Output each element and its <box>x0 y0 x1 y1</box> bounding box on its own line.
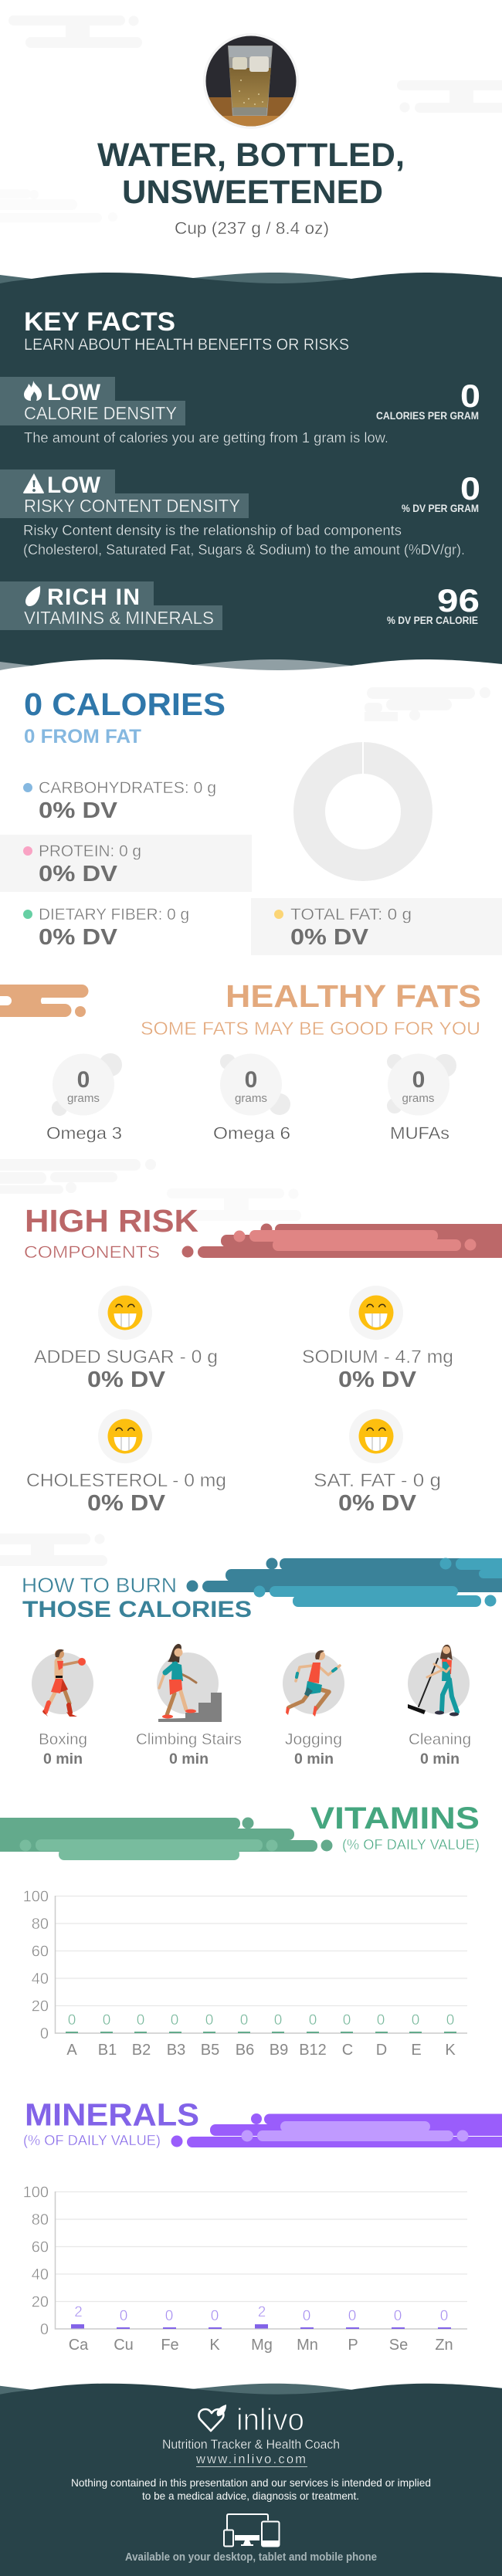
bar chart: minerals: Zn <box>435 2337 453 2354</box>
bar chart: vitamins: 0 <box>240 2012 248 2029</box>
bar chart: minerals <box>23 2184 467 2354</box>
minerals heading: MINERALS <box>25 2097 199 2133</box>
bar chart: minerals: Cu <box>114 2337 134 2354</box>
bar chart: minerals: P <box>348 2337 358 2354</box>
bar chart: vitamins: 20 <box>32 1998 49 2015</box>
swoosh <box>182 1223 502 1258</box>
bar chart: vitamins: 0 <box>205 2012 213 2029</box>
activity minutes: 0 min <box>294 1751 334 1768</box>
cholesterol: 0% DV <box>87 1491 166 1516</box>
omega 3: grams <box>67 1092 100 1105</box>
omega 6: Omega 6 <box>213 1124 290 1143</box>
protein <box>0 835 252 892</box>
title: WATER, BOTTLED, <box>97 137 405 174</box>
activity minutes: 0 min <box>169 1751 209 1768</box>
bar chart: vitamins: 0 <box>343 2012 351 2029</box>
bar chart: vitamins: 0 <box>274 2012 282 2029</box>
bar chart: vitamins: 0 <box>412 2012 419 2029</box>
activity labels: Cleaning <box>409 1731 471 1748</box>
key facts heading: LEARN ABOUT HEALTH BENEFITS OR RISKS <box>24 336 349 354</box>
total fat: 0% DV <box>290 925 369 950</box>
panel: burn calories <box>22 1558 502 1768</box>
panel: key facts <box>0 273 502 683</box>
bar chart: vitamins: B9 <box>270 2042 288 2059</box>
risky content density fact: RISKY CONTENT DENSITY <box>24 496 240 516</box>
activity labels <box>39 1731 471 1748</box>
panel: burn calories: THOSE CALORIES <box>22 1597 252 1622</box>
vitamins and minerals fact: RICH IN <box>47 585 140 610</box>
protein: PROTEIN: 0 g <box>39 842 141 860</box>
high risk heading: HIGH RISK <box>25 1203 198 1239</box>
bar chart: minerals: 0 <box>394 2308 402 2324</box>
bar chart: vitamins: B2 <box>132 2042 151 2059</box>
swoosh <box>171 2113 502 2147</box>
bar chart: vitamins: 0 <box>171 2012 178 2029</box>
activity minutes: 0 min <box>420 1751 460 1768</box>
bar chart: vitamins: E <box>411 2042 422 2059</box>
calorie density fact <box>0 377 480 446</box>
sodium: SODIUM - 4.7 mg <box>302 1347 453 1368</box>
risky content density fact <box>0 469 480 558</box>
calorie density fact: CALORIES PER GRAM <box>376 410 479 422</box>
risky content density fact: Risky Content density is the relationship of bad components <box>23 523 402 538</box>
total fat: TOTAL FAT: 0 g <box>290 906 412 924</box>
carbohydrates: 0% DV <box>39 798 118 823</box>
healthy fats subtitle: SOME FATS MAY BE GOOD FOR YOU <box>141 1019 480 1039</box>
logo wordmark: inlivo <box>236 2403 304 2437</box>
calorie density fact: CALORIE DENSITY <box>24 403 177 423</box>
cholesterol: CHOLESTEROL - 0 mg <box>26 1470 226 1491</box>
sodium: 0% DV <box>338 1368 417 1392</box>
title <box>97 137 405 211</box>
omega 3: 0 <box>77 1067 90 1093</box>
bar chart: minerals: 2 <box>258 2304 266 2320</box>
key facts heading: KEY FACTS <box>24 307 175 337</box>
bar chart: vitamins <box>23 1889 467 2059</box>
bar chart: minerals: 40 <box>32 2266 49 2283</box>
omega 6: 0 <box>245 1067 257 1093</box>
MUFAs <box>387 1053 456 1143</box>
bar chart: vitamins: 100 <box>23 1889 49 1906</box>
key facts heading <box>24 307 349 354</box>
swoosh <box>187 1558 502 1607</box>
vitamins and minerals fact <box>0 581 480 630</box>
vitamins and minerals fact: VITAMINS & MINERALS <box>24 608 214 628</box>
carbohydrates <box>23 779 216 823</box>
calorie density fact: 0 <box>460 378 480 414</box>
disclaimer: to be a medical advice, diagnosis or treatment. <box>142 2490 359 2502</box>
bar chart: vitamins: 0 <box>137 2012 144 2029</box>
activity minutes <box>43 1751 460 1768</box>
cholesterol <box>26 1409 226 1516</box>
dietary fiber: DIETARY FIBER: 0 g <box>39 906 189 924</box>
minerals subtitle: (% OF DAILY VALUE) <box>23 2133 161 2148</box>
bar chart: minerals: 0 <box>303 2308 310 2324</box>
panel: calories <box>0 686 502 955</box>
availability note: Available on your desktop, tablet and mobile phone <box>125 2551 377 2564</box>
bar chart: vitamins: 80 <box>32 1916 49 1933</box>
omega 6: grams <box>235 1092 267 1105</box>
bar chart: minerals: 100 <box>23 2184 49 2201</box>
omega 6 <box>213 1053 290 1143</box>
vitamins subtitle: (% OF DAILY VALUE) <box>342 1837 480 1852</box>
bar chart: vitamins: 0 <box>40 2025 49 2042</box>
calories from fat: 0 FROM FAT <box>24 726 141 747</box>
risky content density fact: LOW <box>47 473 101 498</box>
bar chart: minerals: 60 <box>32 2239 49 2256</box>
bar chart: vitamins: C <box>342 2042 353 2059</box>
bar chart: vitamins: B1 <box>98 2042 117 2059</box>
bar chart: minerals: Mn <box>297 2337 318 2354</box>
donut chart <box>309 741 417 865</box>
risky content density fact: % DV PER GRAM <box>402 503 479 514</box>
risky content density fact: (Cholesterol, Saturated Fat, Sugars & Sodium) to the amount (%DV/gr). <box>23 542 465 558</box>
tagline: Nutrition Tracker & Health Coach <box>162 2438 340 2452</box>
vitamins and minerals fact: % DV PER CALORIE <box>387 615 478 626</box>
logo: heart and leaf <box>198 2405 226 2431</box>
added sugar: ADDED SUGAR - 0 g <box>34 1347 218 1368</box>
protein: 0% DV <box>39 862 118 886</box>
icon: leaf <box>25 586 40 606</box>
saturated fat: SAT. FAT - 0 g <box>314 1470 441 1491</box>
carbohydrates: CARBOHYDRATES: 0 g <box>39 779 216 797</box>
MUFAs: MUFAs <box>390 1124 449 1143</box>
dietary fiber <box>23 906 189 950</box>
bar chart: minerals: 0 <box>211 2308 219 2324</box>
bar chart: vitamins: 40 <box>32 1971 49 1988</box>
bar chart: vitamins: 0 <box>103 2012 110 2029</box>
disclaimer <box>71 2476 431 2502</box>
icon: flame <box>24 381 42 401</box>
bar chart: minerals: K <box>209 2337 220 2354</box>
bar chart: vitamins: D <box>376 2042 387 2059</box>
MUFAs: 0 <box>412 1067 425 1093</box>
calories heading: 0 CALORIES <box>24 686 226 722</box>
omega 3: Omega 3 <box>46 1124 122 1143</box>
bar chart: vitamins: 0 <box>68 2012 76 2029</box>
bar chart: vitamins: B5 <box>201 2042 219 2059</box>
bar chart: minerals: Ca <box>69 2337 89 2354</box>
website link: www.inlivo.com <box>195 2452 306 2466</box>
MUFAs: grams <box>402 1092 434 1105</box>
activity: cleaning <box>408 1645 470 1716</box>
header <box>97 31 405 238</box>
total fat <box>251 898 502 955</box>
bar chart: minerals: Se <box>389 2337 408 2354</box>
bar chart: vitamins: A <box>66 2042 77 2059</box>
components subtitle: COMPONENTS <box>24 1242 160 1262</box>
bar chart: minerals: 0 <box>40 2321 49 2338</box>
added sugar <box>34 1286 218 1392</box>
bar chart: vitamins: 60 <box>32 1943 49 1960</box>
serving size: Cup (237 g / 8.4 oz) <box>175 219 329 238</box>
panel: healthy fats <box>0 978 481 1143</box>
panel: minerals <box>23 2097 502 2354</box>
title: UNSWEETENED <box>122 174 383 211</box>
calorie density fact: The amount of calories you are getting from 1 gram is low. <box>24 430 388 446</box>
activity minutes: 0 min <box>43 1751 83 1768</box>
bar chart: vitamins: K <box>445 2042 456 2059</box>
saturated fat: 0% DV <box>338 1491 417 1516</box>
activity: climbing stairs <box>157 1644 222 1722</box>
bar chart: minerals: 0 <box>348 2308 356 2324</box>
bar chart: minerals: Fe <box>161 2337 179 2354</box>
dietary fiber: 0% DV <box>39 925 118 950</box>
sodium <box>302 1286 453 1392</box>
panel: vitamins <box>0 1802 480 2059</box>
activity: jogging <box>283 1650 344 1717</box>
saturated fat <box>314 1409 441 1516</box>
bar chart: vitamins: B3 <box>167 2042 185 2059</box>
bar chart: vitamins: B6 <box>236 2042 254 2059</box>
bar chart: vitamins: B12 <box>299 2042 327 2059</box>
disclaimer: Nothing contained in this presentation and our services is intended or implied <box>71 2476 431 2489</box>
footer <box>0 2384 502 2576</box>
burn heading: HOW TO BURN <box>22 1574 177 1597</box>
bar chart: minerals: 0 <box>165 2308 173 2324</box>
icon: devices <box>224 2514 280 2547</box>
omega 3 <box>46 1053 122 1143</box>
activity labels: Boxing <box>39 1731 87 1748</box>
bar chart: minerals: 20 <box>32 2293 49 2310</box>
vitamins heading: VITAMINS <box>310 1802 480 1835</box>
healthy fats heading: HEALTHY FATS <box>226 978 481 1014</box>
added sugar: 0% DV <box>87 1368 166 1392</box>
bar chart: minerals: 0 <box>440 2308 448 2324</box>
activity: boxing <box>32 1649 93 1717</box>
background clouds <box>0 15 502 1566</box>
bar chart: vitamins: 0 <box>377 2012 385 2029</box>
panel: high risk <box>24 1203 502 1516</box>
swoosh <box>0 985 88 1017</box>
risky content density fact: 0 <box>460 470 480 507</box>
icon: warning triangle <box>23 473 44 493</box>
bar chart: vitamins: 0 <box>446 2012 454 2029</box>
activity labels: Jogging <box>285 1731 342 1748</box>
bar chart: minerals: 2 <box>74 2304 83 2320</box>
bar chart: minerals: 80 <box>32 2212 49 2229</box>
activity labels: Climbing Stairs <box>136 1731 242 1748</box>
vitamins and minerals fact: 96 <box>437 582 480 619</box>
food photo <box>201 31 301 130</box>
swoosh <box>0 1818 332 1860</box>
bar chart: vitamins: 0 <box>309 2012 317 2029</box>
bar chart: minerals: 0 <box>120 2308 127 2324</box>
bar chart: minerals: Mg <box>251 2337 273 2354</box>
calorie density fact: LOW <box>47 380 101 405</box>
